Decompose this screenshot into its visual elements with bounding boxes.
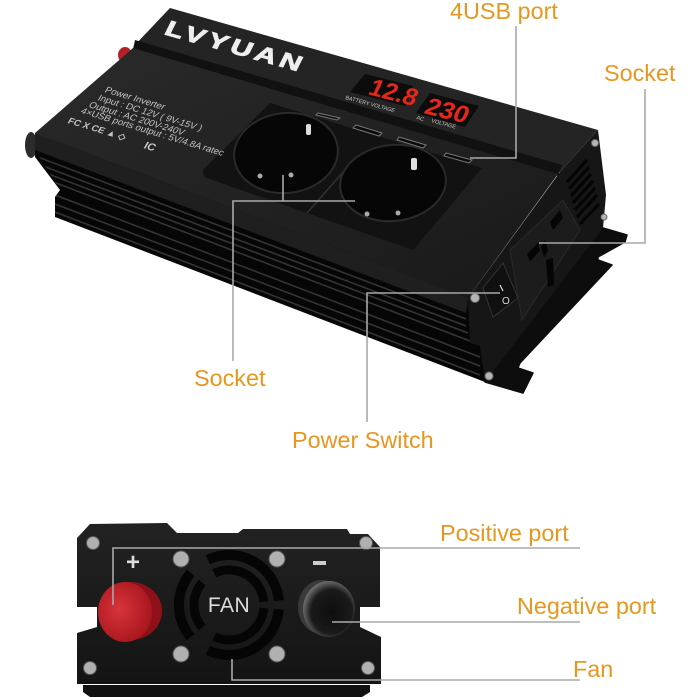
inverter top view xyxy=(25,8,627,393)
label: positive port: Positive port xyxy=(440,520,569,546)
dark groove xyxy=(133,40,562,176)
leader line: power switch xyxy=(367,293,500,422)
label: left socket: Socket xyxy=(194,365,266,391)
front bevel xyxy=(35,133,468,313)
label: negative port: Negative port xyxy=(517,593,657,619)
heat sink fins xyxy=(35,156,480,375)
power switch: O xyxy=(502,296,510,307)
ac voltage display: AC xyxy=(415,115,425,123)
socket plates xyxy=(203,103,482,250)
power switch xyxy=(483,263,518,317)
inverter rear view xyxy=(77,523,381,697)
leader line: negative port xyxy=(332,621,580,623)
spec text: IC xyxy=(141,140,158,154)
leader line: left socket xyxy=(233,175,355,361)
vent slits xyxy=(567,160,599,224)
ac voltage display: VOLTAGE xyxy=(430,118,457,131)
top rear panel xyxy=(133,8,598,172)
spec text: Input : DC 12V ( 9V-15V ) xyxy=(95,93,204,134)
main top panel xyxy=(35,48,558,298)
rear plate xyxy=(77,523,381,684)
end panel xyxy=(468,130,606,382)
bottom flange xyxy=(83,685,370,697)
top view screws xyxy=(470,140,607,380)
battery voltage display: BATTERY VOLTAGE xyxy=(344,95,396,114)
rear screws xyxy=(84,536,374,674)
base flange xyxy=(480,228,627,393)
label: power switch: Power Switch xyxy=(292,427,434,453)
leader line: 4USB port xyxy=(470,26,516,158)
battery voltage display: 12.8 xyxy=(365,75,422,112)
red terminal xyxy=(98,582,162,642)
leader line: positive port xyxy=(113,548,580,605)
spec text: Output : AC 200V-240V xyxy=(86,100,187,138)
spec text: FC X CE ▲ ◇ xyxy=(65,116,129,143)
heat sink body xyxy=(35,133,485,382)
label: right socket: Socket xyxy=(604,60,676,86)
fan label: FAN xyxy=(208,594,250,617)
minus sign xyxy=(313,561,326,565)
black terminal behind body xyxy=(25,132,37,158)
spec text xyxy=(65,85,226,159)
spec text: Power Inverter xyxy=(102,85,167,112)
label: fan: Fan xyxy=(573,656,613,682)
usb ports xyxy=(316,113,472,163)
black terminal xyxy=(298,580,355,637)
red terminal behind body xyxy=(118,47,132,63)
leader line: right socket xyxy=(539,89,645,243)
socket 2 xyxy=(336,140,450,226)
plus sign: + xyxy=(126,549,140,576)
spec text: 4×USB ports output : 5V/4.8A ratec xyxy=(78,106,226,159)
socket 1 xyxy=(230,108,342,198)
leader line: fan xyxy=(232,659,580,680)
ac voltage display: 230 xyxy=(421,93,474,129)
battery voltage display xyxy=(344,74,422,114)
brand logo: LVYUAN xyxy=(161,16,311,77)
fan grille xyxy=(159,535,299,675)
universal socket xyxy=(510,200,580,320)
